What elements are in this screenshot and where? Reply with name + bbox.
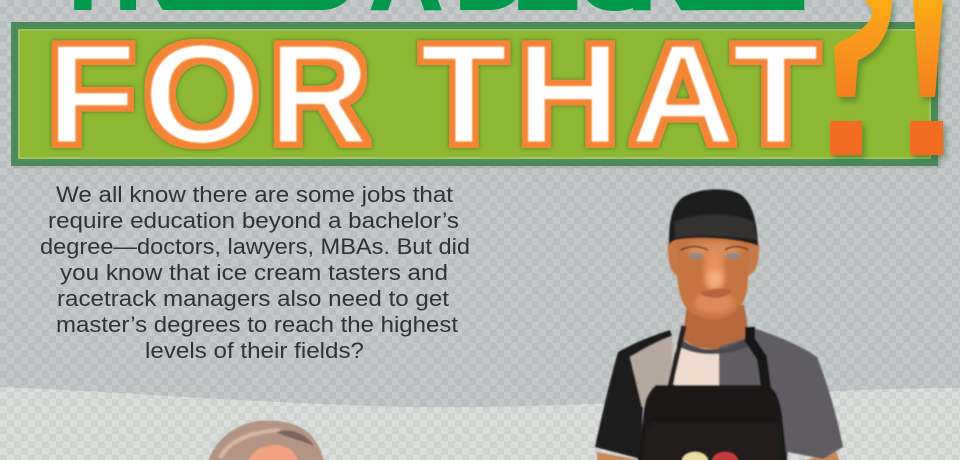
exclamation marks: question mark and bang <box>830 0 943 155</box>
banner heading: FOR THAT: H <box>516 14 620 174</box>
banner heading: FOR THAT: O <box>143 14 261 175</box>
man: ears <box>668 238 759 276</box>
man: black left sleeve <box>595 330 672 460</box>
man: left apron strap <box>670 326 684 386</box>
man: collar <box>678 336 752 354</box>
background: lower light wave band <box>0 387 960 460</box>
intro paragraph: master’s degrees to reach the highest <box>56 312 458 337</box>
intro paragraph: degree—doctors, lawyers, MBAs. But did <box>40 234 470 259</box>
intro paragraph <box>40 182 470 363</box>
intro paragraph: racetrack managers also need to get <box>57 286 449 311</box>
man: arms <box>597 451 840 460</box>
banner heading: FOR THAT <box>46 13 820 175</box>
banner frame <box>11 22 941 168</box>
man: apron <box>638 385 787 460</box>
illustration: ice cream taster man <box>595 189 843 460</box>
man: cream shirt front <box>675 345 719 385</box>
woman: hair light streak <box>220 430 280 458</box>
woman: forehead <box>248 445 298 460</box>
intro paragraph: require education beyond a bachelor’s <box>48 208 459 233</box>
illustration: woman's hair and forehead (cropped at bottom) <box>208 421 324 460</box>
man: apron lower shade <box>644 424 782 460</box>
man: beige left shoulder <box>630 336 672 407</box>
banner heading: FOR THAT: F <box>46 13 136 174</box>
intro paragraph: levels of their fields? <box>145 338 364 363</box>
intro paragraph: you know that ice cream tasters and <box>60 260 448 285</box>
man: neck <box>680 305 752 352</box>
man: cheek and nose highlights <box>686 242 742 314</box>
banner heading: FOR THAT: T <box>420 14 508 174</box>
man: braided right apron strap <box>750 327 766 388</box>
man: ice cream scoops <box>682 452 738 460</box>
man: bandana cap <box>669 189 758 246</box>
intro paragraph: We all know there are some jobs that <box>56 182 453 207</box>
banner heading: FOR THAT: A <box>629 14 737 175</box>
woman: hair <box>208 421 324 460</box>
man: eyebrows and eyes <box>681 247 748 259</box>
man: mouth <box>700 289 732 298</box>
banner heading: FOR THAT: R <box>269 14 370 175</box>
woman: hair shadow <box>276 431 314 446</box>
man: grey shirt right side <box>719 327 843 460</box>
banner heading: FOR THAT: T <box>732 14 820 174</box>
man: face <box>677 236 750 320</box>
